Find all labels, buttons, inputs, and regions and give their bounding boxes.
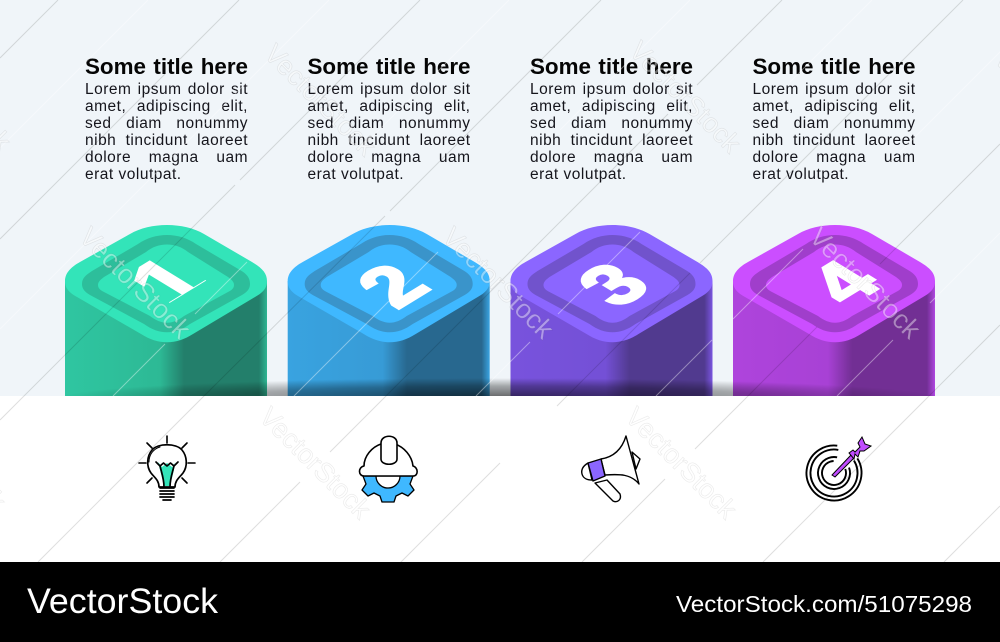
column 1 body: nibh tincidunt laoreet <box>85 132 248 149</box>
column 2 body: erat volutpat. <box>308 166 404 183</box>
column 2 body: sed diam nonummy <box>308 115 470 132</box>
block 1 green: 1 <box>106 243 231 320</box>
column 4 body: nibh tincidunt laoreet <box>752 132 916 149</box>
column 2 body: amet, adipiscing elit, <box>308 98 470 115</box>
column 4 body: erat volutpat. <box>752 166 849 183</box>
icon: megaphone <box>582 436 640 502</box>
footer bar <box>0 562 1000 642</box>
block 2 blue: 2 <box>339 253 447 319</box>
icon: hard hat and gear <box>360 436 417 502</box>
column 3 text <box>530 54 693 183</box>
block 3 violet: 3 <box>559 252 668 318</box>
watermark text: VectorStock <box>436 221 560 345</box>
column 4 text <box>752 54 916 183</box>
column 2 body <box>308 81 470 183</box>
icon: light bulb <box>139 436 195 500</box>
column 4 body: amet, adipiscing elit, <box>752 98 916 115</box>
watermark text: VectorStock <box>73 221 197 345</box>
watermark text <box>0 33 1000 530</box>
block 1 green <box>65 225 267 396</box>
background panel <box>0 0 1000 396</box>
column 4 body: Lorem ipsum dolor sit <box>752 81 916 98</box>
block 3 violet <box>510 225 712 396</box>
column 1 body: erat volutpat. <box>85 166 182 183</box>
watermark text: VectorStock <box>258 38 382 162</box>
column 3 body: Lorem ipsum dolor sit <box>530 81 693 98</box>
column 4 body: sed diam nonummy <box>752 115 916 132</box>
column 3 body: amet, adipiscing elit, <box>530 98 693 115</box>
column 2 body: Lorem ipsum dolor sit <box>308 81 470 98</box>
watermark text: VectorStock <box>253 401 377 525</box>
column 4 body: dolore magna uam <box>752 149 916 166</box>
column 1 body: Lorem ipsum dolor sit <box>85 81 248 98</box>
footer image id: VectorStock.com/51075298 <box>676 591 972 617</box>
column 1 body: amet, adipiscing elit, <box>85 98 248 115</box>
column 4 body <box>752 81 916 183</box>
footer logo: VectorStock <box>27 582 219 621</box>
watermark text: VectorStock <box>803 221 927 345</box>
column 1 body: sed diam nonummy <box>85 115 248 132</box>
block 2 blue <box>288 225 490 396</box>
column 1 body: dolore magna uam <box>85 149 248 166</box>
block 4 magenta: 4 <box>790 250 898 316</box>
column 2 body: nibh tincidunt laoreet <box>308 132 470 149</box>
column 4 title: Some title here <box>752 54 916 79</box>
block ground shadow <box>88 379 906 396</box>
column 2 title: Some title here <box>308 54 470 79</box>
column 3 body: sed diam nonummy <box>530 115 693 132</box>
column 3 body <box>530 81 693 183</box>
column 1 body <box>85 81 248 183</box>
column 3 body: nibh tincidunt laoreet <box>530 132 693 149</box>
column 2 text <box>308 54 470 183</box>
white lower panel <box>0 396 1000 562</box>
block 4 magenta <box>733 225 935 396</box>
column 1 title: Some title here <box>85 54 248 79</box>
column 1 text <box>85 54 248 183</box>
watermark text: VectorStock <box>619 401 743 525</box>
watermark text: VectorStock <box>623 35 747 159</box>
column 3 title: Some title here <box>530 54 693 79</box>
icon: target with dart <box>796 435 872 511</box>
column 3 body: erat volutpat. <box>530 166 627 183</box>
column 3 body: dolore magna uam <box>530 149 693 166</box>
column 2 body: dolore magna uam <box>308 149 470 166</box>
